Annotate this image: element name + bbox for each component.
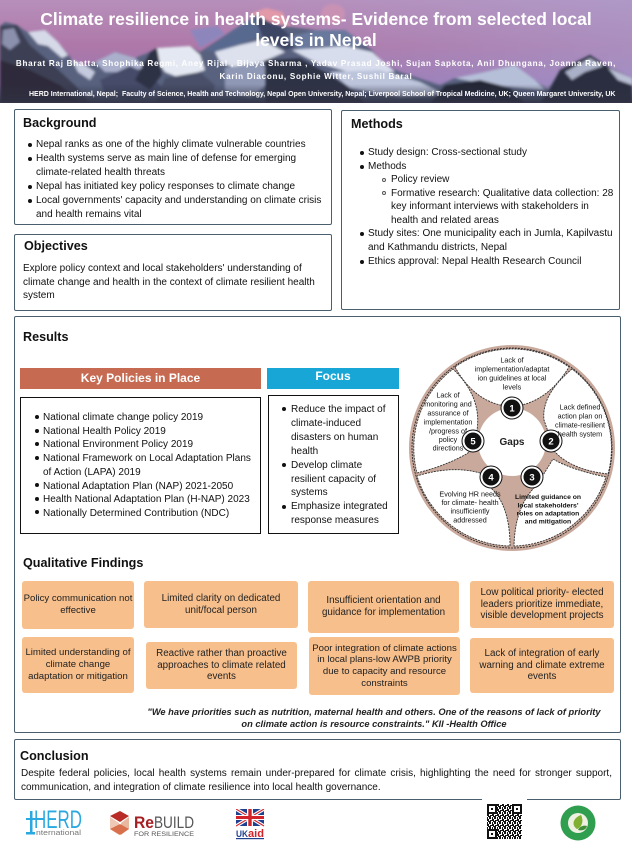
heading: methods: Methods xyxy=(351,117,403,131)
finding 7: due to capacity and resource xyxy=(323,666,446,677)
finding 4 xyxy=(470,581,614,628)
logo: UK aid: aid xyxy=(248,828,264,840)
text: objectives: climate change and health in the context of climate resilient health xyxy=(23,277,315,288)
gap 2 text: climate-resilient xyxy=(555,420,605,430)
panel: results xyxy=(14,316,621,733)
bullet list: methods: health and related areas xyxy=(391,214,499,226)
gap 3 text: local stakeholders' xyxy=(518,502,579,510)
gap 5 text: assurance of xyxy=(427,408,469,418)
marker: 3 xyxy=(521,466,543,488)
gap 4 text: insufficiently xyxy=(450,506,490,516)
box: focus list: Emphasize integrated xyxy=(291,501,388,512)
bullet list: methods: and Kathmandu districts, Nepal xyxy=(368,242,507,253)
gap 2 text: action plan on xyxy=(558,412,602,420)
heading: objectives: Objectives xyxy=(24,239,88,253)
gap 1 text: ion guidelines at local xyxy=(478,374,547,382)
logo: ReBUILD for Resilience: Re xyxy=(134,813,154,832)
chart: gaps wheel xyxy=(409,345,615,551)
finding 7: Poor integration of climate actions xyxy=(312,643,457,654)
finding 3: Insufficient orientation and xyxy=(326,595,441,606)
finding 6: approaches to climate related xyxy=(157,660,286,671)
gap 1 text: implementation/adaptat xyxy=(475,364,549,374)
snow block centre-left xyxy=(155,46,205,78)
box: key policies list: Health National Adaptation Plan (H-NAP) 2023 xyxy=(43,494,250,505)
bullet list: background xyxy=(28,139,321,220)
gap 1 text: levels xyxy=(503,382,522,392)
finding 5 xyxy=(22,637,134,693)
bullet list: methods: Study design: Cross-sectional study xyxy=(368,147,527,158)
gap 5 text: /progress of xyxy=(429,426,467,436)
finding 7: constraints xyxy=(361,678,408,689)
finding 8: Lack of integration of early xyxy=(485,648,599,659)
gap 5 text: Lack of xyxy=(436,390,460,400)
banner: mountain header xyxy=(0,0,632,103)
header: key policies in place xyxy=(20,368,261,389)
authors: Karin Diaconu, Sophie Witter, Sushil Baral xyxy=(220,72,412,81)
text: objectives xyxy=(23,263,315,301)
finding 7: in local plans-low AWPB priority xyxy=(317,654,452,665)
gap 2 text xyxy=(555,402,605,438)
bullet list: methods: Methods xyxy=(368,161,406,172)
logo: ReBUILD for Resilience xyxy=(110,811,194,837)
finding 7 xyxy=(309,637,460,695)
box: focus list: Develop climate xyxy=(291,460,362,471)
marker: 1: 1 xyxy=(509,404,515,414)
box: key policies list: National Environment Policy 2019 xyxy=(43,439,193,450)
finding 4: visible development projects xyxy=(480,610,604,621)
finding 2 xyxy=(144,581,298,628)
box: key policies list xyxy=(20,397,261,534)
box: focus list: climate-induced xyxy=(291,418,361,429)
finding 3: guidance for implementation xyxy=(322,607,445,618)
bullet list: methods xyxy=(360,147,613,267)
bullet list: background: Nepal has initiated key policy responses to climate change xyxy=(36,181,295,192)
finding 1 xyxy=(22,581,134,629)
box: key policies list: Nationally Determined Contribution (NDC) xyxy=(43,508,229,519)
finding 6 xyxy=(146,642,297,689)
finding 6: events xyxy=(207,671,236,682)
right dark mountain xyxy=(540,55,632,103)
finding 4: Low political priority- elected xyxy=(480,587,604,598)
finding 2: unit/focal person xyxy=(185,604,257,616)
quote: "We have priorities such as nutrition, maternal health and others. One of the reasons of lack of priority xyxy=(147,707,601,717)
text: conclusion: Despite federal policies, local health systems remain under-prepared for climate crisis, highlighting the need for stronger support, communication, and integration of climate resilience into local health governance. xyxy=(21,768,612,792)
gap 1 text: Lack of xyxy=(500,356,524,364)
bullet list: methods: Ethics approval: Nepal Health Research Council xyxy=(368,256,581,267)
gap 4 text: Evolving HR needs xyxy=(439,490,501,498)
title: levels in Nepal xyxy=(255,30,377,50)
left snow peak xyxy=(28,30,68,58)
authors: Bharat Raj Bhatta, Shophika Regmi, Aney Rijal , Bijaya Sharma , Yadav Prasad Joshi, Sujan Sapkota, Anil Dhungana, Joanna Raven, xyxy=(16,59,616,68)
bullet list: background: Nepal ranks as one of the highly climate vulnerable countries xyxy=(36,139,306,150)
box: focus list: systems xyxy=(291,487,328,498)
marker: 4: 4 xyxy=(488,472,494,484)
finding 3 xyxy=(308,581,459,633)
left dark slope xyxy=(0,25,90,103)
marker: 5: 5 xyxy=(470,436,476,448)
heading: qualitative findings: Qualitative Findings xyxy=(23,556,143,570)
box: focus list: health xyxy=(291,446,318,457)
right distant peak xyxy=(455,65,545,90)
marker: 3: 3 xyxy=(529,472,535,484)
authors xyxy=(16,59,616,81)
bullet list: methods: Policy review xyxy=(391,174,449,185)
title xyxy=(40,9,592,50)
finding 8: warning and climate extreme xyxy=(479,660,605,671)
box: key policies list: National Adaptation Plan (NAP) 2021-2050 xyxy=(43,481,233,492)
box: focus list: response measures xyxy=(291,515,379,526)
finding 5: Limited understanding of xyxy=(25,647,131,658)
quote xyxy=(147,707,601,729)
box: focus list: resilient capacity of xyxy=(291,474,376,485)
marker: 1 xyxy=(501,397,523,419)
affiliations: HERD International, Nepal; Faculty of Science, Health and Technology, Nepal Open University, Nepal; Liverpool School of Tropical Medicine, UK; Queen Margaret University, UK xyxy=(29,91,615,98)
bullet list: background: Local governments' capacity and understanding on climate crisis xyxy=(36,195,321,206)
finding 2: Limited clarity on dedicated xyxy=(162,593,280,604)
panel: background xyxy=(14,109,332,225)
logo: UK aid: UK xyxy=(236,829,248,840)
bullet list: methods: Formative research: Qualitative data collection: 28 xyxy=(391,188,613,198)
panel: methods xyxy=(341,110,620,310)
panel: conclusion xyxy=(14,739,621,800)
gap 5 text: policy xyxy=(439,435,458,444)
box: focus list: disasters on human xyxy=(291,432,378,443)
gap 5 text xyxy=(424,390,472,452)
gap 4 text: for climate- health xyxy=(441,498,499,507)
gap 3 text xyxy=(515,494,581,526)
marker: 2: 2 xyxy=(548,436,554,448)
finding 5: adaptation or mitigation xyxy=(28,671,128,682)
gap 2 text: Lack defined xyxy=(560,402,600,412)
text: objectives: Explore policy context and local stakeholders' understanding of xyxy=(23,263,302,274)
text: objectives: system xyxy=(23,290,55,301)
finding 6: Reactive rather than proactive xyxy=(156,648,287,659)
bullet list: methods: Study sites: One municipality each in Jumla, Kapilvastu xyxy=(368,228,613,239)
gap 3 text: and mitigation xyxy=(525,518,571,526)
gap 1 text xyxy=(475,356,549,392)
bullet list: background: and health remains vital xyxy=(36,209,142,220)
gap 4 text: addressed xyxy=(453,516,487,524)
gap 3 text: roles on adaptation xyxy=(517,510,579,518)
finding 4: leaders prioritize immediate, xyxy=(481,599,603,610)
qr code xyxy=(482,799,527,841)
main peak xyxy=(205,15,268,52)
bullet list: background: climate-related health threats xyxy=(36,167,165,178)
box: focus list: Reduce the impact of xyxy=(291,404,386,415)
finding 8 xyxy=(470,638,614,693)
heading: background: Background xyxy=(23,116,96,130)
finding 1: effective xyxy=(60,605,96,616)
header: focus xyxy=(267,368,399,389)
finding 1: Policy communication not xyxy=(24,593,132,604)
label: gaps: Gaps xyxy=(499,437,525,448)
box: focus list xyxy=(268,395,399,534)
gap 2 text: health system xyxy=(558,430,602,438)
heading: conclusion: Conclusion xyxy=(20,749,89,763)
title: Climate resilience in health systems- Evidence from selected local xyxy=(40,9,592,29)
panel: objectives xyxy=(14,234,332,311)
logo: printed on paper badge xyxy=(560,806,596,840)
bullet list: methods: key informant interviews with stakeholders in xyxy=(391,201,589,212)
box: key policies list: of Action (LAPA) 2019 xyxy=(43,467,141,478)
marker: 4 xyxy=(480,466,502,488)
gap 3 text: Limited guidance on xyxy=(515,494,581,501)
gap 5 text: directions xyxy=(433,444,464,452)
header: key policies in place: Key Policies in Place xyxy=(81,371,200,385)
heading: results: Results xyxy=(23,330,68,344)
finding 5: climate change xyxy=(46,659,110,670)
quote: on climate action is resource constraints." KII -Health Office xyxy=(241,719,507,729)
gap 4 text xyxy=(439,490,501,524)
logo: UK aid xyxy=(236,809,264,840)
gap 5 text: monitoring and xyxy=(424,400,472,408)
box: key policies list: National climate change policy 2019 xyxy=(43,412,203,423)
box: key policies list: National Health Policy 2019 xyxy=(43,426,166,437)
marker: 2 xyxy=(540,430,562,452)
header: focus: Focus xyxy=(315,369,351,383)
bullet list: background: Health systems serve as main line of defense for emerging xyxy=(36,153,296,164)
box: key policies list: National Framework on Local Adaptation Plans xyxy=(43,453,251,464)
finding 8: events xyxy=(528,671,556,682)
marker: 5 xyxy=(462,430,484,452)
gap 5 text: implementation xyxy=(424,418,472,426)
